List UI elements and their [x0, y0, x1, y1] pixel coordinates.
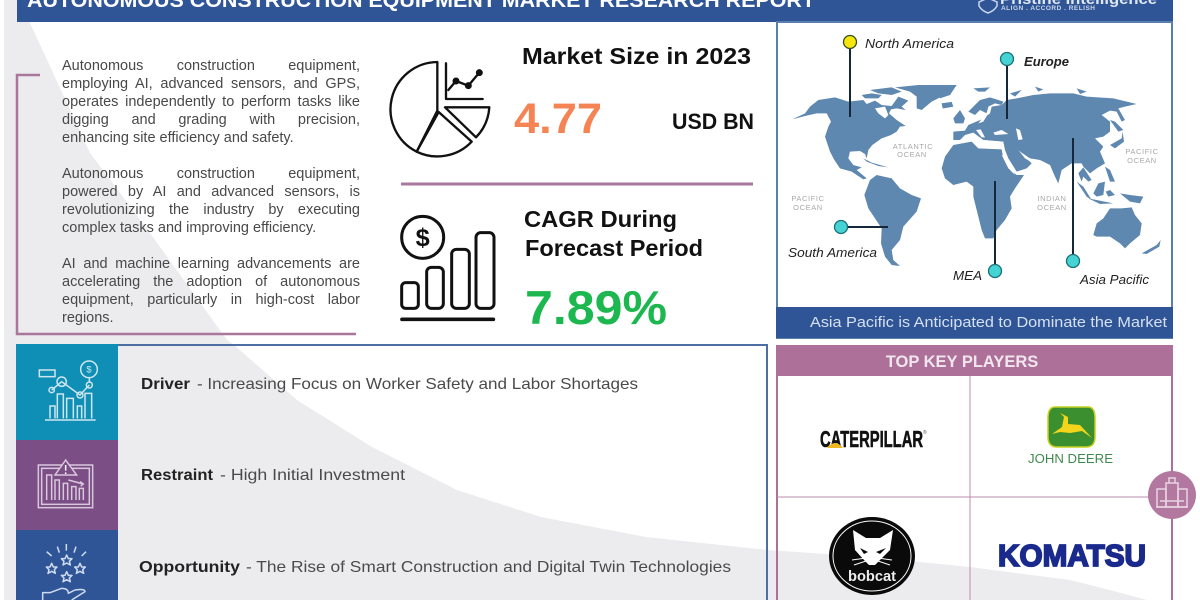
logo: John Deere [1028, 407, 1113, 466]
ocean labels: PACIFIC [791, 194, 825, 203]
ocean labels: PACIFIC [1125, 147, 1159, 156]
divider [401, 182, 753, 186]
pin: South America: South America [788, 245, 877, 260]
paragraph 3: equipment, particularly in high-cost labor [62, 292, 360, 308]
paragraph 2: Autonomous construction equipment, [62, 166, 360, 182]
description text block [62, 58, 360, 326]
paragraph 3: AI and machine learning advancements are [62, 256, 360, 272]
logo: John Deere: JOHN DEERE [1028, 451, 1113, 466]
map caption bar: Asia Pacific is Anticipated to Dominate the Market [810, 314, 1168, 331]
ocean labels: INDIAN [1037, 194, 1067, 203]
opportunity text: - The Rise of Smart Construction and Digital Twin Technologies [246, 559, 731, 576]
icon: driver analytics [39, 361, 97, 420]
driver text: - Increasing Focus on Worker Safety and Labor Shortages [197, 376, 638, 393]
driver text: Driver [141, 376, 190, 393]
panel: market dynamics [16, 344, 767, 600]
restraint text: - High Initial Investment [220, 467, 406, 484]
ocean labels: OCEAN [1037, 203, 1067, 212]
logo: Caterpillar: ® [923, 429, 927, 436]
paragraph 1: Autonomous construction equipment, [62, 58, 360, 74]
map caption bar [776, 307, 1173, 338]
pin: MEA: MEA [953, 268, 982, 283]
paragraph 3: accelerating the adoption of autonomous [62, 274, 360, 290]
ocean labels: ATLANTIC [893, 142, 933, 151]
paragraph 1: enhancing site efficiency and safety. [62, 130, 294, 146]
panel: top key players [776, 345, 1196, 600]
ocean labels: OCEAN [1127, 156, 1157, 165]
restraint row [16, 440, 406, 530]
paragraph 1: operates independently to perform tasks like [62, 94, 360, 110]
paragraph 1 [62, 58, 360, 146]
driver row [16, 344, 638, 440]
logo: Caterpillar [820, 426, 927, 452]
bracket around description [17, 75, 356, 334]
key players heading [776, 345, 1173, 376]
opportunity row [16, 530, 731, 600]
icon: buildings badge [1148, 471, 1196, 519]
paragraph 2: powered by AI and advanced sensors, is [62, 184, 360, 200]
paragraph 3: regions. [62, 310, 114, 326]
pin: Europe: Europe [1024, 54, 1069, 69]
logo: Pristine Intelligence [979, 0, 1157, 13]
header bar [17, 0, 1173, 22]
ocean labels: OCEAN [897, 150, 927, 159]
CAGR heading: Forecast Period [525, 235, 703, 261]
CAGR heading: CAGR During [524, 206, 677, 232]
world map [792, 85, 1161, 266]
market size value: 4.77 [514, 95, 602, 143]
ocean labels [791, 142, 1159, 212]
panel: regional map [776, 22, 1173, 338]
paragraph 1: digging and grading with precision, [62, 112, 360, 128]
pin: North America [844, 36, 954, 117]
icon: restraint chart [38, 460, 93, 508]
restraint text [141, 467, 406, 484]
logo: Komatsu: KOMATSU [998, 538, 1146, 573]
icon: opportunity stars and hand [43, 544, 86, 600]
logo: Bobcat: bobcat [848, 568, 896, 585]
paragraph 2: complex tasks and improving efficiency. [62, 220, 316, 236]
pin: North America: North America [865, 36, 954, 51]
logo: Bobcat [829, 517, 915, 595]
opportunity text: Opportunity [139, 559, 240, 576]
map water details [957, 108, 1033, 175]
pin: Asia Pacific: Asia Pacific [1079, 272, 1149, 287]
paragraph 2 [62, 166, 360, 236]
market size unit: USD BN [672, 109, 754, 134]
paragraph 2: revolutionizing the industry by executing [62, 202, 360, 218]
CAGR value: 7.89% [525, 281, 667, 334]
key players heading: TOP KEY PLAYERS [886, 353, 1038, 371]
icon: dollar and bars: $ [416, 224, 430, 252]
logo: Pristine Intelligence: ALIGN . ACCORD . RELISH [1001, 5, 1095, 12]
ocean labels: OCEAN [793, 203, 823, 212]
restraint text: Restraint [141, 467, 214, 484]
icon: dollar and bars [402, 216, 494, 319]
icon: pie chart [391, 62, 489, 156]
pin: Asia Pacific [1066, 138, 1149, 287]
market size heading: Market Size in 2023 [522, 43, 751, 69]
logo: Caterpillar: CATERPILLAR [820, 426, 923, 452]
pin: Europe [1000, 52, 1069, 119]
paragraph 3 [62, 256, 360, 326]
icon: driver analytics: $ [86, 365, 92, 375]
paragraph 1: employing AI, advanced sensors, and GPS, [62, 76, 360, 92]
pin: MEA [953, 181, 1002, 283]
pin: South America [788, 220, 888, 260]
